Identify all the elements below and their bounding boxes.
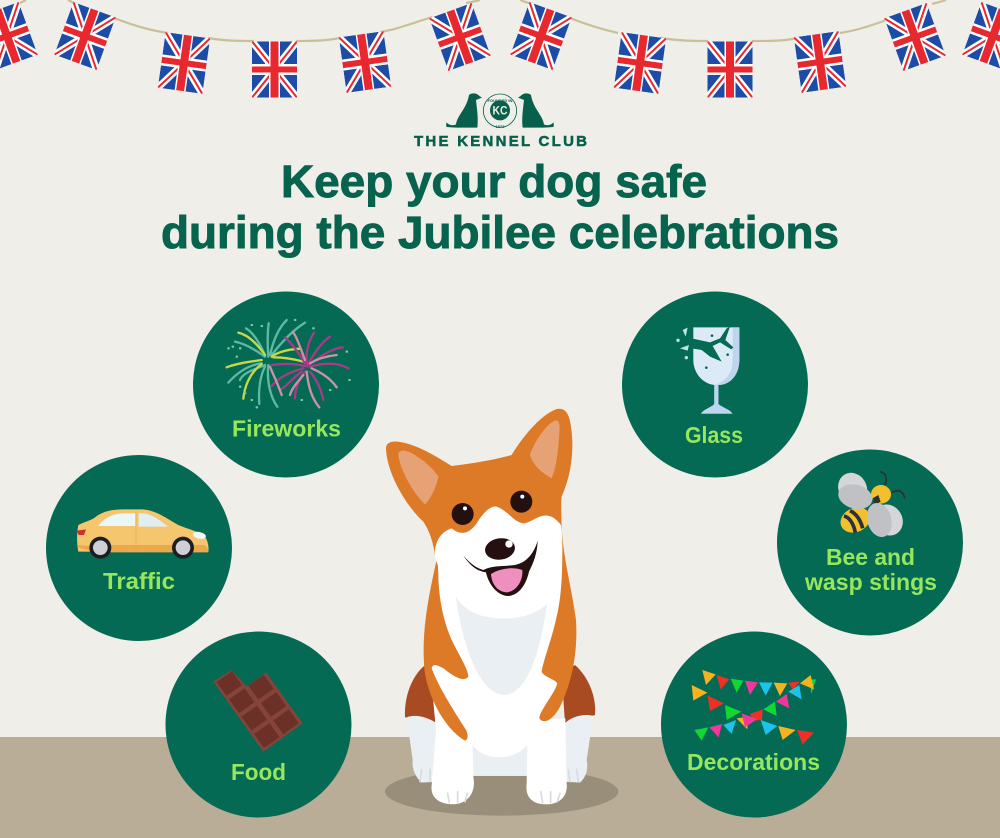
icon: bee: [833, 467, 908, 541]
panel: glass: Glass: [685, 422, 743, 448]
floor shadow: [385, 768, 618, 816]
logo: The Kennel Club: FOUNDED IN: [488, 98, 513, 103]
bunting: string of Union Jack flags: [0, 0, 1000, 99]
panel: traffic: Traffic: [103, 568, 175, 594]
icon: chocolate bar: [213, 657, 303, 752]
toes: [420, 769, 578, 803]
icon: car: [77, 509, 209, 559]
nose: [484, 536, 516, 562]
illustration: corgi sitting: [385, 409, 618, 816]
panel: fireworks: [193, 292, 379, 478]
mouth and tongue: [463, 541, 538, 596]
title: during the Jubilee celebrations: [161, 207, 839, 258]
white body and front legs: [430, 527, 567, 804]
haunches: [405, 665, 595, 723]
icon: broken glass: [676, 327, 739, 414]
title: [161, 156, 839, 258]
panel: bee and wasp stings: wasp stings: [804, 569, 937, 595]
panel: food: Food: [231, 759, 286, 785]
logo: The Kennel Club: 1873: [496, 124, 505, 129]
panel: glass: [622, 292, 808, 478]
inner ears: [398, 421, 560, 504]
panel: fireworks: Fireworks: [232, 416, 341, 442]
back feet: [407, 715, 593, 783]
panel: decorations: [661, 632, 847, 818]
logo: The Kennel Club: THE KENNEL CLUB: [414, 133, 587, 150]
face mask: [435, 506, 562, 619]
panel: bee and wasp stings: Bee and: [826, 544, 915, 570]
panel: food: [166, 632, 352, 818]
orange coat: [424, 527, 576, 741]
panel: traffic: [46, 455, 232, 641]
panel: decorations: Decorations: [687, 749, 820, 775]
logo: The Kennel Club: [414, 93, 587, 150]
icon: party bunting: [692, 670, 816, 744]
icon: fireworks: [227, 320, 350, 407]
eyes: [452, 491, 532, 525]
head: [386, 409, 572, 567]
chest shading: [456, 593, 548, 695]
title: Keep your dog safe: [281, 156, 707, 207]
logo: The Kennel Club: KC: [492, 106, 508, 118]
panel: bee and wasp stings: [777, 450, 963, 636]
